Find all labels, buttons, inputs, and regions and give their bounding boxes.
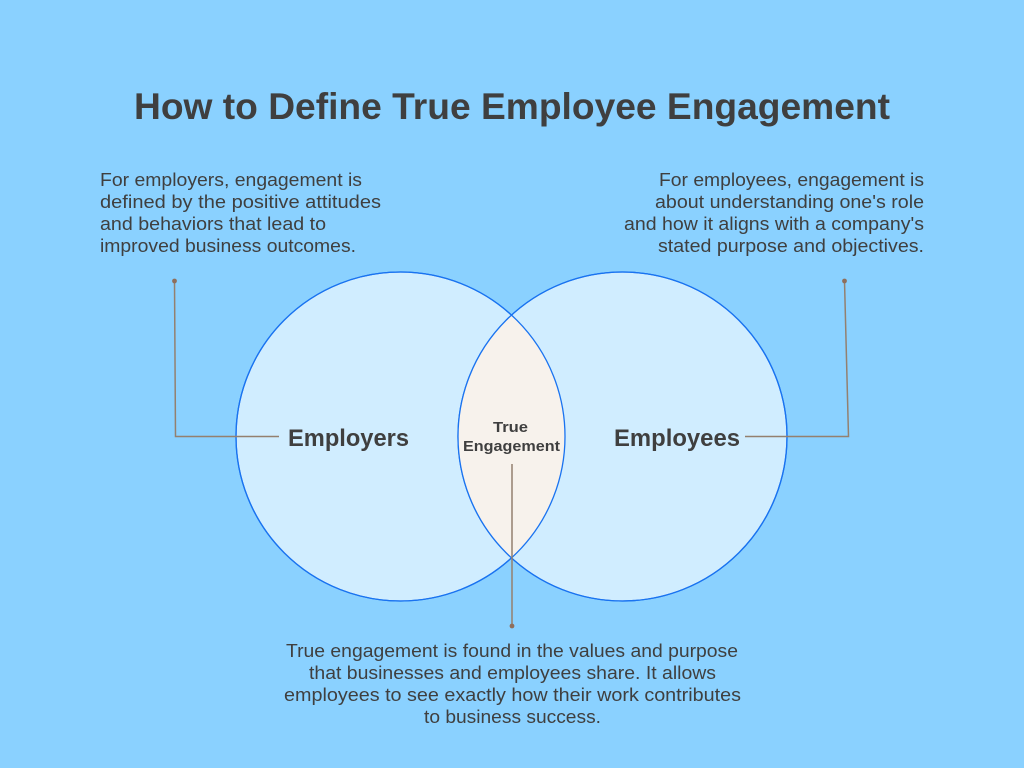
text block: true engagement description: True engagement is found in the values and purpose [286, 640, 738, 661]
venn diagram [236, 272, 787, 601]
label: true engagement: True [493, 419, 528, 436]
connector: employers [172, 279, 279, 436]
label: true engagement: Engagement [463, 438, 560, 455]
text block: employees description: about understanding one's role [655, 191, 924, 212]
text block: employees description: and how it aligns with a company's [624, 213, 924, 234]
label: employers: Employers [288, 425, 409, 452]
text block: true engagement description [284, 640, 741, 727]
text block: employers description: defined by the positive attitudes [100, 191, 381, 212]
text block: employees description [624, 169, 924, 256]
text block: true engagement description: that businesses and employees share. It allows [309, 662, 716, 683]
text block: true engagement description: employees to see exactly how their work contributes [284, 684, 741, 705]
text block: employers description [100, 169, 381, 256]
title: How to Define True Employee Engagement [134, 86, 890, 127]
text block: employees description: For employees, engagement is [659, 169, 924, 190]
text block: employers description: For employers, engagement is [100, 169, 362, 190]
label: employees: Employees [614, 425, 740, 452]
text block: employers description: and behaviors that lead to [100, 213, 326, 234]
text block: employees description: stated purpose and objectives. [658, 235, 924, 256]
connector: employees [745, 279, 848, 436]
text block: employers description: improved business outcomes. [100, 235, 356, 256]
overlap outline [236, 272, 787, 601]
text block: true engagement description: to business success. [424, 706, 601, 727]
connector: true engagement [510, 464, 514, 628]
label: true engagement [463, 419, 560, 455]
circle: employees [458, 272, 787, 601]
overlap: true engagement [458, 316, 564, 557]
circle: employers [236, 272, 565, 601]
